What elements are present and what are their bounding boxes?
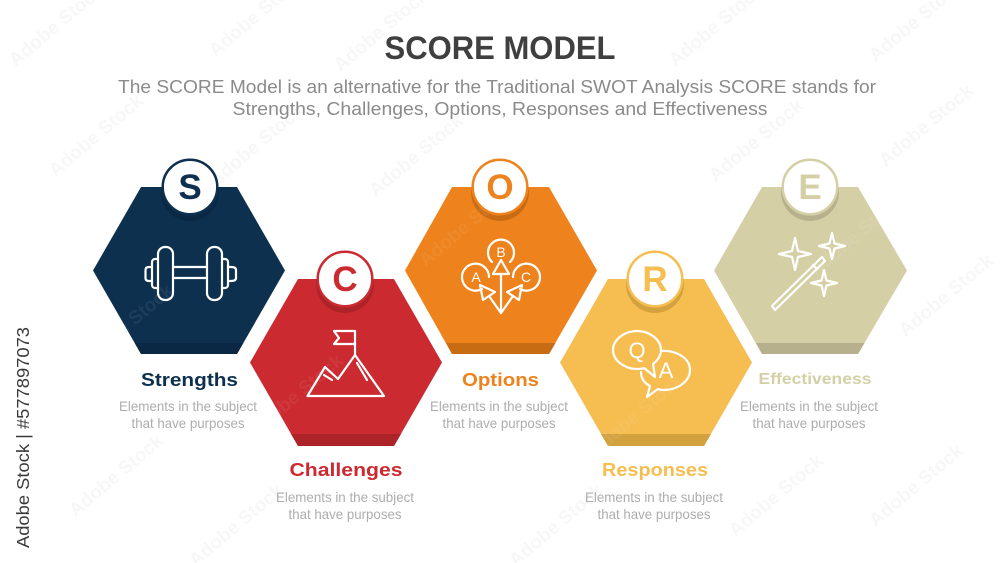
badge: S	[163, 160, 217, 214]
hexagon: Strengths	[93, 187, 285, 354]
watermark pattern: Adobe Stock	[705, 95, 808, 186]
icon: Q and A speech bubbles: Q	[628, 338, 646, 363]
description: Challenges: Elements in the subject	[276, 489, 414, 505]
icon: options arrows	[462, 240, 540, 313]
description: Responses: Elements in the subject	[585, 489, 723, 505]
description: Strengths: that have purposes	[132, 415, 244, 431]
subtitle: The SCORE Model is an alternative for the Traditional SWOT Analysis SCORE stands for	[118, 76, 876, 97]
badge: C: C	[332, 260, 358, 299]
watermark over hexagons: Adobe Stock	[75, 280, 178, 371]
panel: Challenges	[250, 252, 442, 522]
label: Responses: Responses	[602, 460, 708, 480]
label: Challenges: Challenges	[290, 460, 402, 480]
description: Strengths: Elements in the subject	[119, 398, 257, 414]
badge: S: S	[178, 168, 202, 207]
title: SCORE MODEL	[384, 30, 616, 66]
icon: dumbbell	[146, 247, 236, 300]
badge: O	[473, 160, 527, 214]
label: Strengths: Strengths	[141, 370, 238, 390]
badge: E: E	[798, 168, 822, 207]
subtitle: Strengths, Challenges, Options, Responses and Effectiveness	[232, 98, 768, 119]
description: Effectiveness: that have purposes	[752, 415, 866, 431]
watermark pattern: Adobe Stock	[45, 90, 148, 181]
hexagon: Options	[405, 187, 597, 354]
watermark pattern: Adobe Stock	[65, 430, 168, 521]
hexagon: Responses	[560, 279, 752, 446]
badge: O: O	[486, 168, 514, 207]
watermark over hexagons: Adobe Stock	[585, 370, 688, 461]
watermark pattern: Adobe Stock	[725, 450, 828, 541]
label: Effectiveness: Effectiveness	[758, 371, 872, 388]
watermark over hexagons	[75, 180, 908, 461]
watermark pattern: Adobe Stock	[865, 440, 968, 531]
panel: Strengths	[93, 160, 285, 431]
watermark over hexagons: Adobe Stock	[415, 180, 518, 271]
watermark over hexagons: Adobe Stock	[805, 190, 908, 281]
description: Effectiveness	[740, 398, 878, 431]
hexagon: Effectiveness	[714, 187, 907, 354]
description: Options: that have purposes	[442, 415, 556, 431]
description: Responses: that have purposes	[598, 506, 710, 522]
icon: options arrows: C	[521, 269, 531, 285]
icon: Q and A speech bubbles	[613, 331, 690, 397]
icon: magic wand	[772, 233, 845, 310]
stock id side text: Adobe Stock | #577897073	[13, 327, 33, 548]
label: Options: Options	[462, 370, 539, 390]
subtitle	[118, 76, 876, 119]
icon: options arrows: B	[496, 244, 506, 260]
badge: R: R	[642, 260, 668, 299]
badge: R	[628, 252, 682, 306]
watermark pattern: Adobe Stock	[895, 250, 998, 341]
description: Options	[430, 398, 568, 431]
icon: mountain flag	[308, 331, 384, 396]
watermark over hexagons: Adobe Stock	[245, 350, 348, 441]
description: Challenges	[276, 489, 414, 522]
watermark pattern: Adobe Stock	[365, 110, 468, 201]
description: Strengths	[119, 398, 257, 431]
description: Challenges: that have purposes	[288, 506, 402, 522]
description: Responses	[585, 489, 723, 522]
badge: C	[318, 252, 372, 306]
watermark pattern: Adobe Stock	[875, 80, 978, 171]
icon: Q and A speech bubbles: A	[659, 358, 674, 383]
badge: E	[783, 160, 837, 214]
panel: Responses	[560, 252, 752, 522]
hexagon: Challenges	[250, 279, 442, 446]
description: Effectiveness: Elements in the subject	[740, 398, 878, 414]
description: Options: Elements in the subject	[430, 398, 568, 414]
icon: options arrows: A	[471, 269, 481, 285]
panel: Options	[405, 160, 597, 431]
watermark pattern: Adobe Stock	[205, 100, 308, 191]
panel: Effectiveness	[714, 160, 907, 431]
